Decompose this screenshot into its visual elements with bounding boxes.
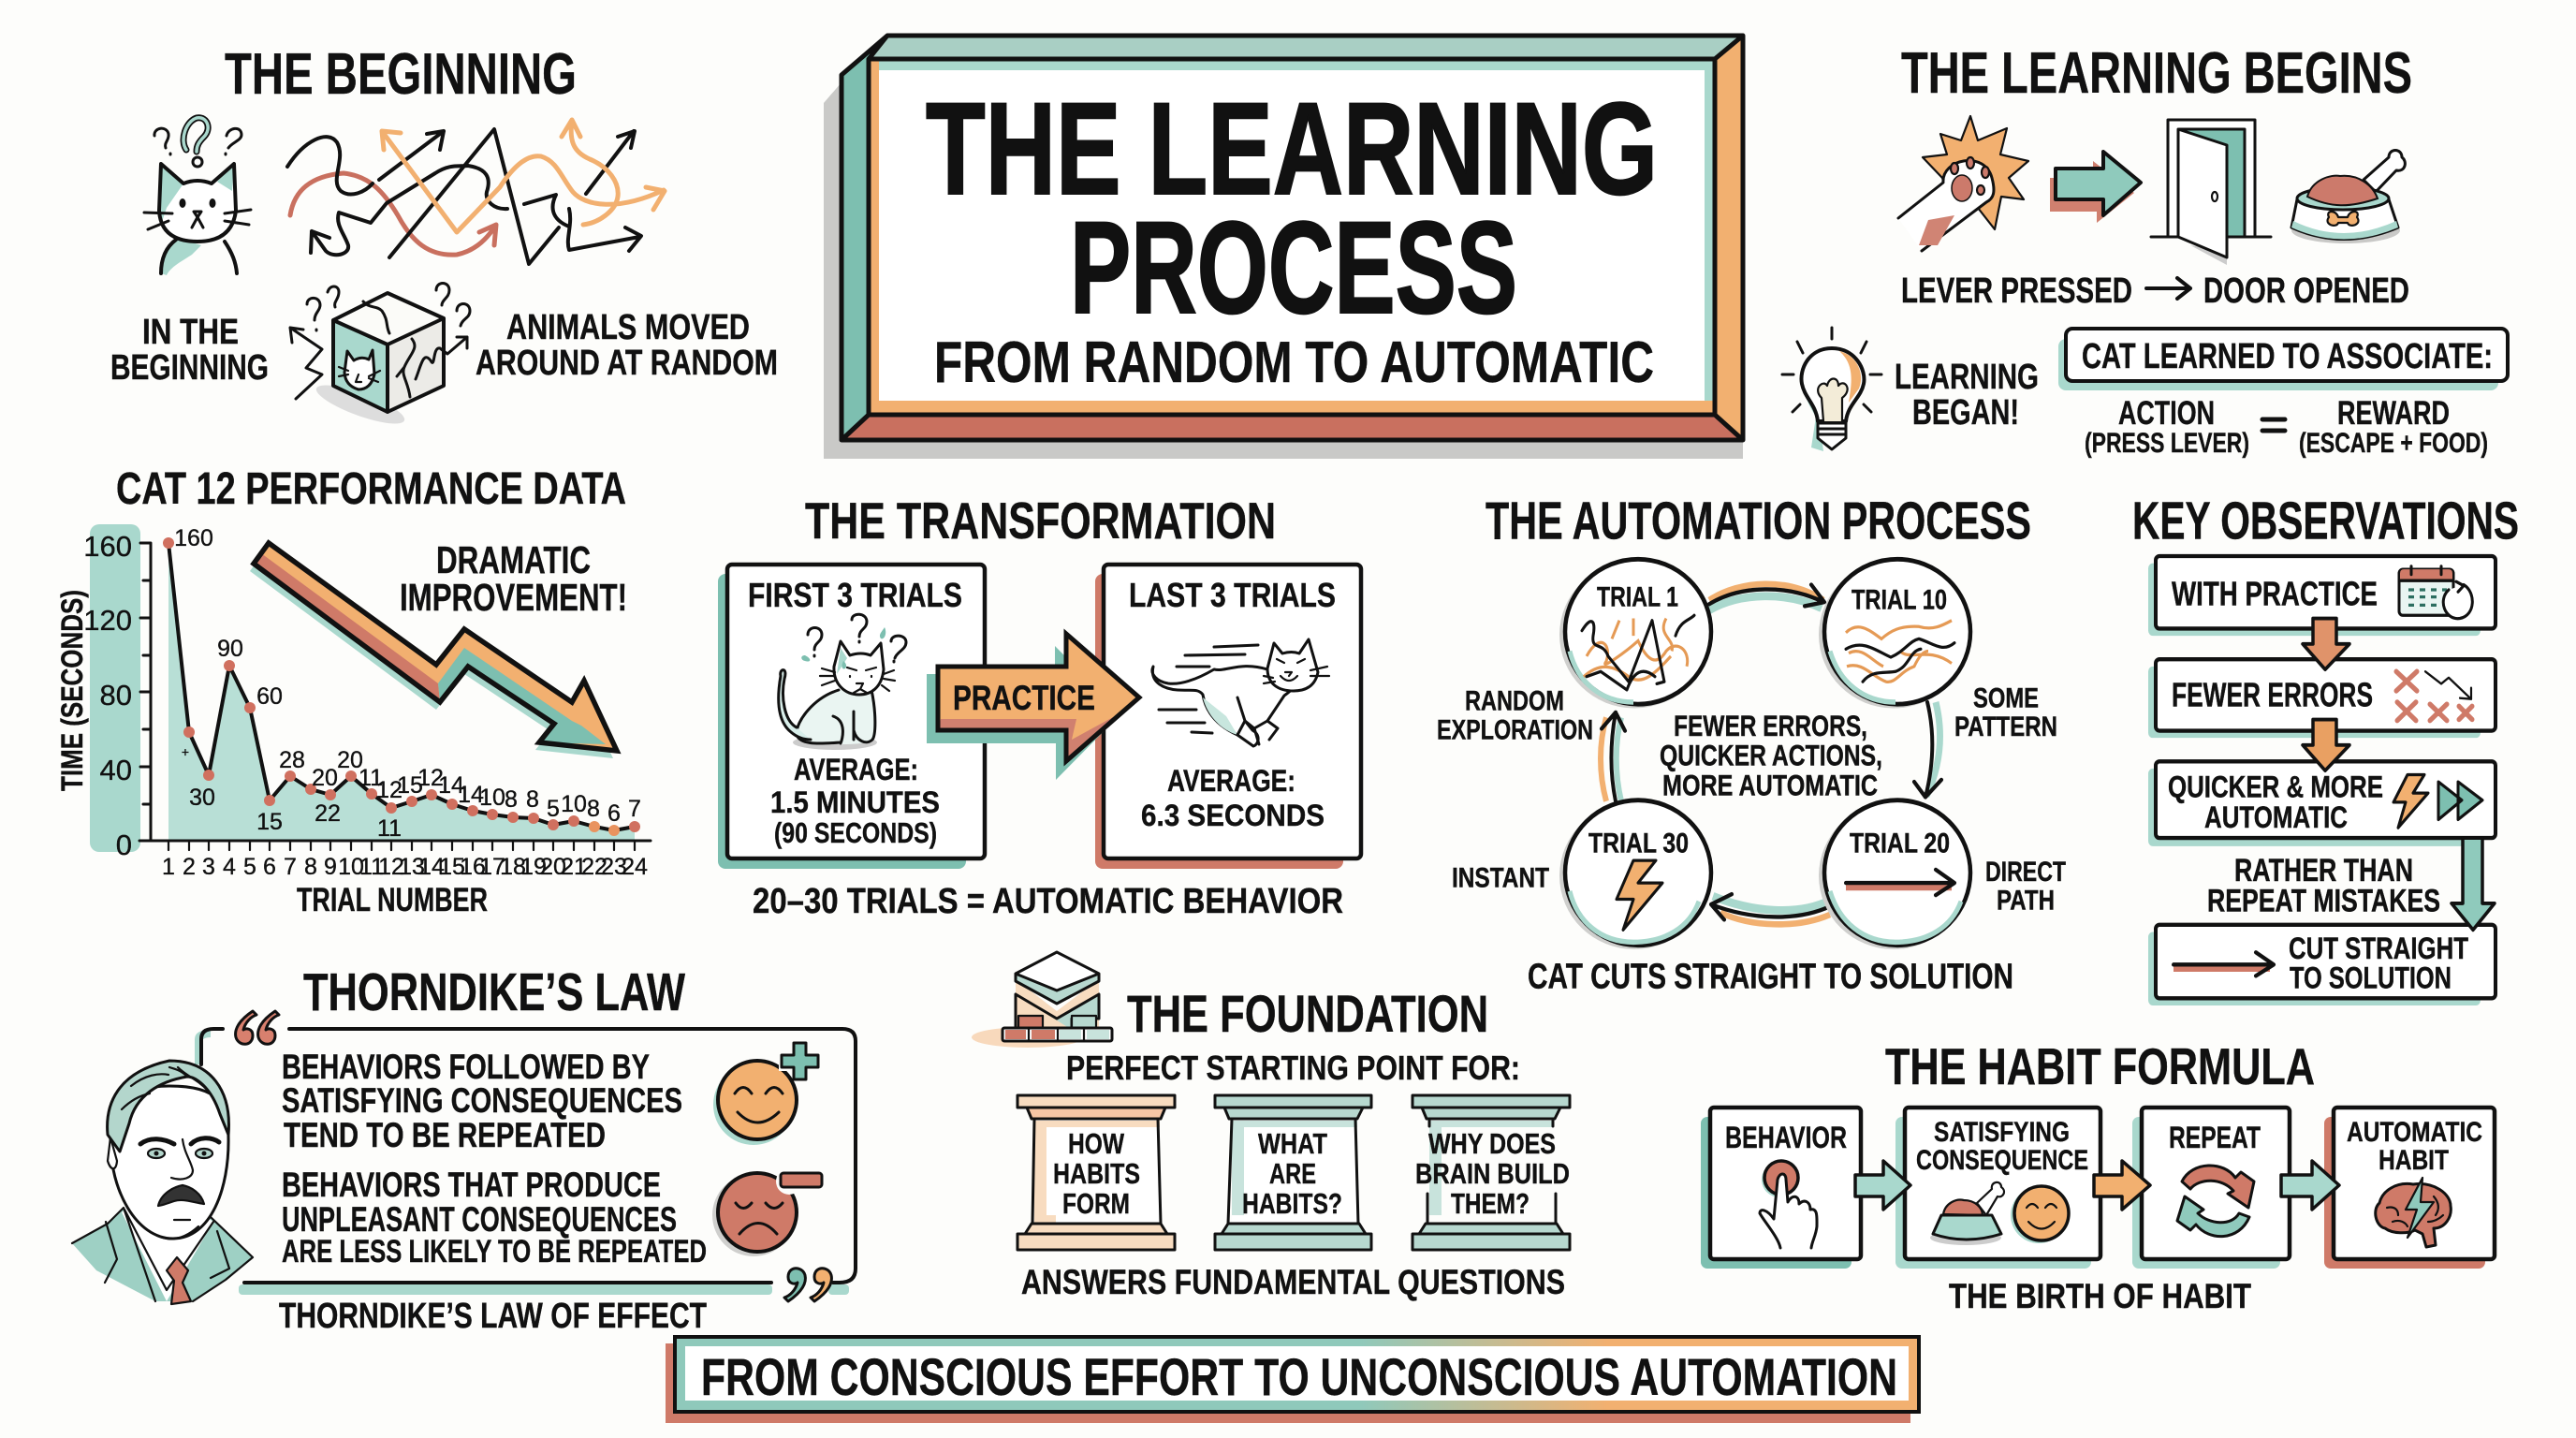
arrow: practice xyxy=(927,634,1139,780)
label: direct path: DIRECT xyxy=(1985,856,2066,887)
card: first 3 trials: (90 SECONDS) xyxy=(774,816,937,849)
text: perfect starting point: PERFECT STARTING POINT FOR: xyxy=(1066,1049,1520,1087)
panel: the beginning xyxy=(110,42,778,431)
formula: action equals reward: (ESCAPE + FOOD) xyxy=(2299,428,2488,459)
icon: calendar xyxy=(2399,566,2472,619)
step: behavior: BEHAVIOR xyxy=(1725,1121,1847,1154)
line chart: time per trial: + xyxy=(182,744,189,759)
card: last 3 trials: 6.3 SECONDS xyxy=(1141,799,1325,832)
text: learning began xyxy=(1895,358,2039,433)
panel: the automation process xyxy=(1437,491,2066,996)
box: with practice xyxy=(2148,556,2496,636)
box: quicker and more automatic: AUTOMATIC xyxy=(2204,800,2348,834)
panel: key observations xyxy=(2132,491,2519,1005)
line chart: time per trial: 11 xyxy=(377,815,402,842)
pillar: how habits form: HOW xyxy=(1068,1127,1125,1160)
box: cut straight to solution xyxy=(2148,925,2496,1005)
node: trial 1: TRIAL 1 xyxy=(1597,580,1678,612)
line chart: time per trial: 23 xyxy=(601,854,627,880)
line chart: time per trial: 8 xyxy=(304,854,317,880)
text: lever pressed, door opened: DOOR OPENED xyxy=(2203,271,2409,311)
line chart: time per trial: 16 xyxy=(460,854,486,880)
label: instant: INSTANT xyxy=(1452,861,1549,893)
node: trial 20 xyxy=(1819,800,1970,949)
text: second rule: BEHAVIORS THAT PRODUCE xyxy=(282,1166,661,1204)
box: fewer errors xyxy=(2148,659,2496,738)
arrow: dramatic improvement xyxy=(250,543,617,758)
text: rather than repeat mistakes: RATHER THAN xyxy=(2234,853,2413,888)
line chart: time per trial: 20 xyxy=(312,765,338,791)
line chart: time per trial: 160 xyxy=(83,530,132,563)
node: trial 30: TRIAL 30 xyxy=(1588,827,1689,858)
line chart: time per trial: 5 xyxy=(547,796,560,822)
pillar: why does brain build them: BRAIN BUILD xyxy=(1415,1157,1570,1190)
text: second rule xyxy=(282,1166,707,1269)
line chart: time per trial: 5 xyxy=(243,854,256,880)
callout: cat learned to associate xyxy=(2058,329,2508,390)
line chart: time per trial: 8 xyxy=(526,786,539,813)
card: first 3 trials: 1.5 MINUTES xyxy=(770,785,940,819)
icon: food bowl with bone xyxy=(2291,150,2405,243)
pillar: what are habits: ARE xyxy=(1269,1157,1316,1190)
icon: happy face xyxy=(2011,1186,2069,1243)
card: last 3 trials: AVERAGE: xyxy=(1167,764,1295,798)
line chart: time per trial: 15 xyxy=(397,772,423,799)
center text: fewer errors: MORE AUTOMATIC xyxy=(1662,770,1878,802)
banner: conscious to unconscious: FROM CONSCIOUS EFFORT TO UNCONSCIOUS AUTOMATION xyxy=(701,1347,1897,1406)
line chart: time per trial: 13 xyxy=(399,854,425,880)
formula: action equals reward xyxy=(2085,395,2488,459)
heading: the automation process: THE AUTOMATION PROCESS xyxy=(1486,491,2031,550)
icon: bolt and fast forward xyxy=(2393,774,2482,828)
heading: the foundation: THE FOUNDATION xyxy=(1127,984,1488,1043)
line chart: time per trial: 90 xyxy=(217,636,243,662)
cycle arrows xyxy=(1601,584,1941,924)
arrow: behavior to consequence xyxy=(1855,1161,1910,1210)
line chart: time per trial: 12 xyxy=(378,854,404,880)
heading: the learning begins: THE LEARNING BEGINS xyxy=(1901,41,2412,106)
box: cut straight to solution: CUT STRAIGHT xyxy=(2289,932,2468,965)
icon: shrinking errors xyxy=(2396,671,2472,721)
card: first 3 trials: AVERAGE: xyxy=(794,753,918,786)
line chart: time per trial: 14 xyxy=(418,854,445,880)
center text: fewer errors: QUICKER ACTIONS, xyxy=(1660,741,1882,772)
banner: conscious to unconscious xyxy=(666,1337,1919,1423)
card: first 3 trials xyxy=(718,565,985,869)
label: random exploration: EXPLORATION xyxy=(1437,713,1593,745)
panel: thorndike's law xyxy=(72,962,856,1336)
line chart: time per trial: 28 xyxy=(279,747,305,773)
card: last 3 trials xyxy=(1095,565,1361,869)
pillar: what are habits: WHAT xyxy=(1258,1127,1327,1160)
card: first 3 trials: FIRST 3 TRIALS xyxy=(748,576,962,614)
line chart: time per trial xyxy=(55,524,651,918)
node: trial 10 xyxy=(1819,559,1970,709)
card: last 3 trials: LAST 3 TRIALS xyxy=(1129,576,1336,614)
pillar: what are habits: HABITS? xyxy=(1242,1187,1342,1220)
icon: running cat xyxy=(1152,639,1329,746)
text: 20-30 trials: 20–30 TRIALS = AUTOMATIC BEHAVIOR xyxy=(753,882,1343,921)
line chart: time per trial: 24 xyxy=(622,854,648,880)
line chart: time per trial: 19 xyxy=(520,854,547,880)
step: behavior xyxy=(1701,1108,1861,1269)
icon: finger pressing button xyxy=(1760,1161,1817,1248)
line chart: time per trial: 11 xyxy=(359,765,383,791)
icon: paw pressing lever xyxy=(1898,116,2028,251)
line chart: time per trial: 18 xyxy=(500,854,526,880)
line chart: time per trial: 0 xyxy=(116,829,132,861)
text: lever pressed, door opened: LEVER PRESSED xyxy=(1901,271,2132,311)
caption: the birth of habit: THE BIRTH OF HABIT xyxy=(1949,1277,2251,1315)
text: rather than repeat mistakes xyxy=(2207,853,2440,918)
step: satisfying consequence: SATISFYING xyxy=(1934,1117,2070,1148)
line chart: time per trial: 40 xyxy=(100,754,132,786)
step: repeat: REPEAT xyxy=(2169,1121,2261,1154)
icon: brain with bolt xyxy=(2376,1178,2451,1247)
text: first rule: BEHAVIORS FOLLOWED BY xyxy=(282,1048,650,1086)
step: satisfying consequence: CONSEQUENCE xyxy=(1916,1145,2088,1176)
box: quicker and more automatic xyxy=(2148,761,2496,846)
step: repeat xyxy=(2132,1108,2290,1269)
text: lever pressed, door opened xyxy=(1901,271,2409,311)
line chart: time per trial: 160 xyxy=(174,525,213,551)
node: trial 20: TRIAL 20 xyxy=(1850,827,1950,858)
arrow: orange down 2 xyxy=(2303,720,2349,770)
pillar: why does brain build them: WHY DOES xyxy=(1428,1127,1556,1160)
line chart: time per trial: 60 xyxy=(256,683,283,710)
pillar: what are habits xyxy=(1215,1095,1371,1250)
box: with practice: WITH PRACTICE xyxy=(2172,576,2378,613)
arrow: teal down xyxy=(2452,838,2495,930)
icon: confused sitting cat xyxy=(779,614,906,750)
line chart: time per trial: 21 xyxy=(561,854,587,880)
node: trial 30 xyxy=(1559,800,1711,949)
pillar: how habits form xyxy=(1017,1095,1175,1250)
callout text: dramatic improvement: IMPROVEMENT! xyxy=(400,576,627,619)
line chart: time per trial: 7 xyxy=(284,854,297,880)
line chart: time per trial: 14 xyxy=(438,772,464,799)
line chart: time per trial: 2 xyxy=(183,854,196,880)
pillar: why does brain build them: THEM? xyxy=(1451,1187,1530,1220)
arrow: lever to door xyxy=(2050,152,2141,223)
formula: action equals reward: ACTION xyxy=(2118,395,2215,432)
panel: main title: PROCESS xyxy=(1070,194,1517,341)
arrow: consequence to repeat xyxy=(2094,1161,2150,1210)
line chart: time per trial: 120 xyxy=(83,604,132,637)
label: direct path: PATH xyxy=(1997,884,2055,916)
step: automatic habit: HABIT xyxy=(2378,1145,2449,1176)
text: learning began: BEGAN! xyxy=(1912,393,2019,433)
heading: cat 12 performance data: CAT 12 PERFORMANCE DATA xyxy=(116,464,626,514)
line chart: time per trial: 6 xyxy=(263,854,276,880)
panel: the learning begins xyxy=(1782,41,2508,459)
formula: action equals reward: REWARD xyxy=(2337,395,2450,432)
line chart: time per trial: 12 xyxy=(417,765,444,791)
line chart: time per trial: 12 xyxy=(376,777,402,803)
text: animals moved around at random: ANIMALS MOVED xyxy=(506,308,750,347)
line chart: time per trial: 20 xyxy=(540,854,566,880)
text: second rule: UNPLEASANT CONSEQUENCES xyxy=(282,1200,677,1239)
caption: law of effect: THORNDIKE’S LAW OF EFFECT xyxy=(279,1297,707,1336)
panel: the habit formula xyxy=(1701,1037,2495,1315)
title text: THE LEARNING xyxy=(926,75,1658,222)
step: automatic habit: AUTOMATIC xyxy=(2347,1117,2482,1148)
icon: open quote xyxy=(236,1011,279,1044)
label: some pattern: PATTERN xyxy=(1954,711,2057,741)
quote frame xyxy=(195,1029,856,1295)
subtitle: FROM RANDOM TO AUTOMATIC xyxy=(934,330,1654,395)
panel: the transformation xyxy=(718,492,1361,921)
icon: puzzle box xyxy=(290,283,470,431)
icon: food bowl xyxy=(1930,1182,2004,1245)
center text: fewer errors: FEWER ERRORS, xyxy=(1674,711,1867,742)
icon: tangled random arrows xyxy=(287,120,665,264)
icon: sad face with minus xyxy=(712,1168,822,1256)
caption: cat cuts straight: CAT CUTS STRAIGHT TO SOLUTION xyxy=(1528,956,2013,996)
line chart: time per trial: 10 xyxy=(338,854,364,880)
text: first rule xyxy=(282,1048,682,1154)
step: automatic habit xyxy=(2324,1108,2495,1269)
line chart: time per trial: 6 xyxy=(607,800,621,827)
label: direct path xyxy=(1985,856,2066,916)
panel: the foundation xyxy=(972,952,1570,1301)
line chart: time per trial: 7 xyxy=(628,796,641,822)
portrait: thorndike xyxy=(72,1061,253,1304)
heading: the habit formula: THE HABIT FORMULA xyxy=(1885,1037,2315,1095)
panel: cat 12 performance data xyxy=(55,464,651,918)
label: random exploration xyxy=(1437,685,1593,745)
heading: the beginning: THE BEGINNING xyxy=(225,42,577,107)
pillar: how habits form: HABITS xyxy=(1053,1157,1140,1190)
text: first rule: TEND TO BE REPEATED xyxy=(284,1116,606,1154)
arrow: repeat to habit xyxy=(2281,1161,2339,1210)
line chart: time per trial: TIME (SECONDS) xyxy=(55,590,89,791)
line chart: time per trial: 20 xyxy=(337,747,363,773)
panel: main title xyxy=(824,36,1743,459)
box: quicker and more automatic: QUICKER & MORE xyxy=(2168,770,2383,804)
node: trial 10: TRIAL 10 xyxy=(1852,584,1947,615)
pillar: why does brain build them xyxy=(1412,1095,1570,1250)
line chart: time per trial: 11 xyxy=(359,854,384,880)
center text: fewer errors xyxy=(1660,711,1882,802)
pillar: how habits form: FORM xyxy=(1062,1187,1130,1220)
line chart: time per trial: 1 xyxy=(162,854,175,880)
heading: thorndike's law: THORNDIKE’S LAW xyxy=(303,962,685,1022)
box: fewer errors: FEWER ERRORS xyxy=(2172,677,2373,714)
line chart: time per trial: 22 xyxy=(315,800,341,827)
line chart: time per trial: 17 xyxy=(479,854,505,880)
line chart: time per trial: TRIAL NUMBER xyxy=(297,882,488,918)
icon: confused cat xyxy=(144,118,251,275)
line chart: time per trial: 15 xyxy=(439,854,465,880)
text: first rule: SATISFYING CONSEQUENCES xyxy=(282,1081,682,1120)
icon: open door xyxy=(2151,120,2271,265)
arrow: orange down 1 xyxy=(2303,619,2349,669)
box: cut straight to solution: TO SOLUTION xyxy=(2290,961,2452,995)
text: second rule: ARE LESS LIKELY TO BE REPEATED xyxy=(282,1234,707,1269)
callout text: dramatic improvement: DRAMATIC xyxy=(436,538,591,581)
icon: repeat cycle xyxy=(2177,1166,2254,1237)
label: some pattern xyxy=(1954,682,2057,741)
line chart: time per trial: 22 xyxy=(581,854,607,880)
line chart: time per trial: 4 xyxy=(223,854,236,880)
line chart: time per trial: 10 xyxy=(479,785,505,811)
icon: stacked blocks xyxy=(972,952,1112,1048)
text: rather than repeat mistakes: REPEAT MISTAKES xyxy=(2207,883,2440,918)
callout text: dramatic improvement xyxy=(400,538,627,619)
icon: light bulb xyxy=(1782,328,1881,451)
line chart: time per trial: 8 xyxy=(587,796,600,822)
line chart: time per trial: 15 xyxy=(256,809,283,835)
caption: answers fundamental questions: ANSWERS FUNDAMENTAL QUESTIONS xyxy=(1021,1263,1565,1301)
arrow: practice: PRACTICE xyxy=(953,679,1095,717)
panel: the beginning: BEGINNING xyxy=(110,348,269,388)
line chart: time per trial: 9 xyxy=(324,854,337,880)
line chart: time per trial: 80 xyxy=(100,679,132,712)
node: trial 1 xyxy=(1559,559,1711,709)
label: some pattern: SOME xyxy=(1973,682,2039,713)
line chart: time per trial: 30 xyxy=(189,785,215,811)
text: learning began: LEARNING xyxy=(1895,358,2039,397)
panel: the beginning: AROUND AT RANDOM xyxy=(476,344,778,383)
heading: the transformation: THE TRANSFORMATION xyxy=(805,492,1276,550)
icon: close quote xyxy=(784,1269,831,1301)
line chart: time per trial: 14 xyxy=(458,782,484,808)
line chart: time per trial: 3 xyxy=(202,854,215,880)
line chart: time per trial: 10 xyxy=(561,791,587,817)
text: in the beginning: IN THE xyxy=(142,313,239,352)
icon: happy face with plus xyxy=(713,1043,818,1145)
line chart: time per trial: 8 xyxy=(505,786,518,813)
formula: action equals reward: (PRESS LEVER) xyxy=(2085,428,2249,459)
label: random exploration: RANDOM xyxy=(1465,685,1564,716)
step: satisfying consequence xyxy=(1895,1108,2100,1269)
